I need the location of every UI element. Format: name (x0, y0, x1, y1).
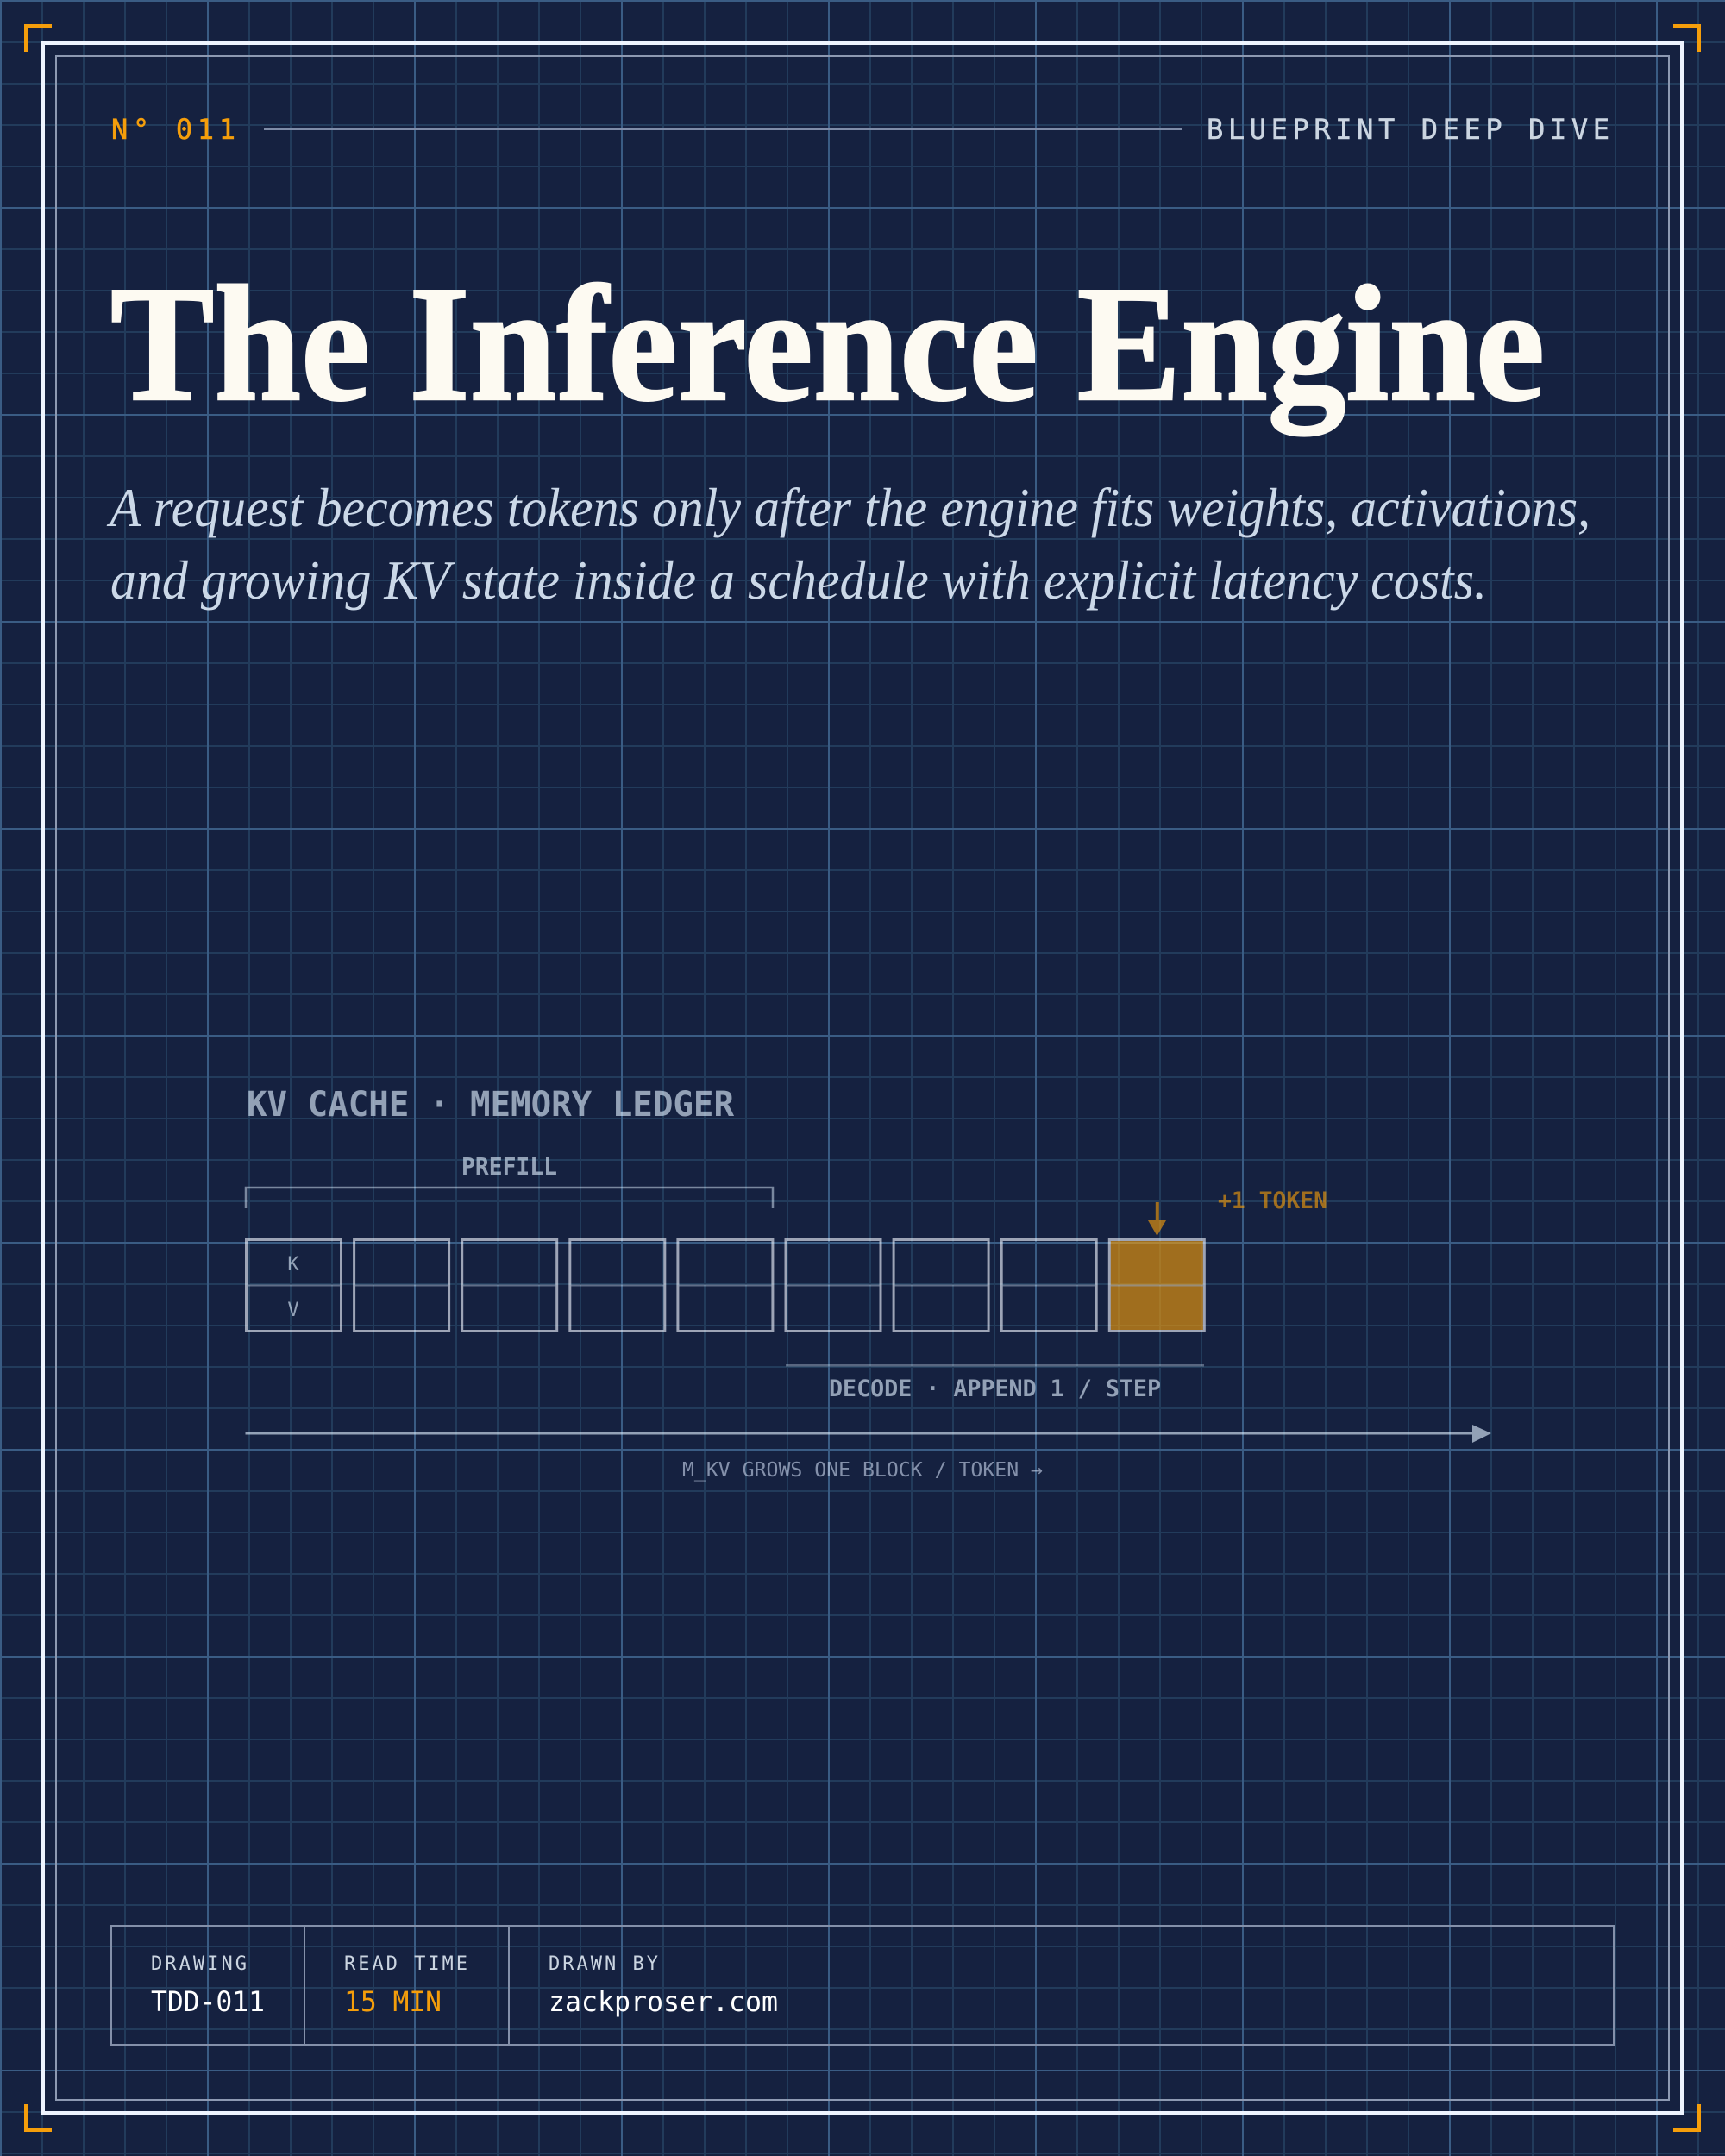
read time cell: 15 MIN (344, 1985, 442, 2018)
drawing cell (151, 1953, 265, 2018)
K and V labels: K (287, 1254, 299, 1275)
read time cell (344, 1953, 467, 2018)
header rule (264, 128, 1182, 130)
prefill label: PREFILL (461, 1152, 557, 1181)
K and V labels: V (287, 1300, 299, 1321)
subtitle (106, 477, 1590, 611)
drawing cell: TDD-011 (151, 1985, 265, 2018)
KV cache diagram (245, 1085, 1491, 1482)
issue number: N° 011 (111, 113, 235, 146)
drawn by cell: zackproser.com (549, 1985, 778, 2018)
block dividers (247, 1285, 1204, 1287)
header row (111, 113, 1609, 146)
footer dividers (304, 1926, 509, 2045)
drawn by cell: DRAWN BY (549, 1953, 658, 1975)
decode label: DECODE · APPEND 1 / STEP (829, 1376, 1161, 1402)
growth arrow (245, 1425, 1491, 1443)
append arrow (1148, 1202, 1166, 1236)
drawing cell: DRAWING (151, 1953, 247, 1975)
subtitle: A request becomes tokens only after the engine fits weights, activations, (106, 477, 1590, 538)
prefill bracket (246, 1188, 773, 1208)
subtitle: and growing KV state inside a schedule with explicit latency costs. (110, 549, 1487, 611)
drawn by cell (549, 1953, 778, 2018)
footer border (111, 1926, 1614, 2045)
footer title block (111, 1926, 1614, 2045)
read time cell: READ TIME (344, 1953, 467, 1975)
token label: +1 TOKEN (1218, 1188, 1327, 1214)
title: The Inference Engine (110, 252, 1545, 436)
K and V labels (287, 1254, 299, 1321)
memory blocks (247, 1240, 1096, 1332)
growth caption: M_KV GROWS ONE BLOCK / TOKEN → (682, 1459, 1043, 1482)
series label: BLUEPRINT DEEP DIVE (1207, 113, 1609, 146)
diagram heading: KV CACHE · MEMORY LEDGER (247, 1085, 735, 1125)
new token block (1109, 1240, 1204, 1332)
decode rule (786, 1364, 1204, 1366)
